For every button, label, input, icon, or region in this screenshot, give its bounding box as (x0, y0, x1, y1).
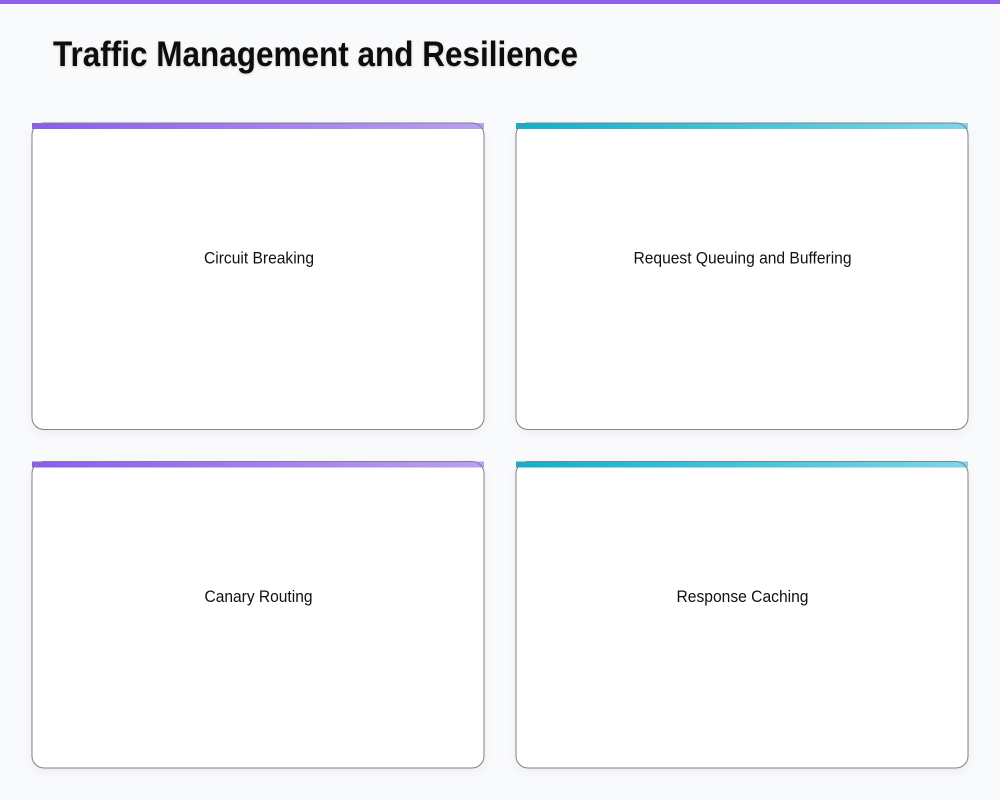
panel: Circuit Breaking: Circuit Breaking (204, 248, 314, 268)
panel: Canary Routing: Canary Routing (204, 587, 312, 606)
panel: Circuit Breaking (32, 123, 484, 430)
panel: Response Caching (516, 462, 968, 768)
panel: Request Queuing and Buffering: Request Queuing and Buffering (634, 248, 852, 268)
top accent bar (0, 0, 1000, 4)
title: Traffic Management and Resilience (53, 35, 578, 74)
panel: Canary Routing (32, 462, 484, 768)
panel: Response Caching: Response Caching (676, 587, 808, 606)
panel: Request Queuing and Buffering (516, 123, 968, 430)
